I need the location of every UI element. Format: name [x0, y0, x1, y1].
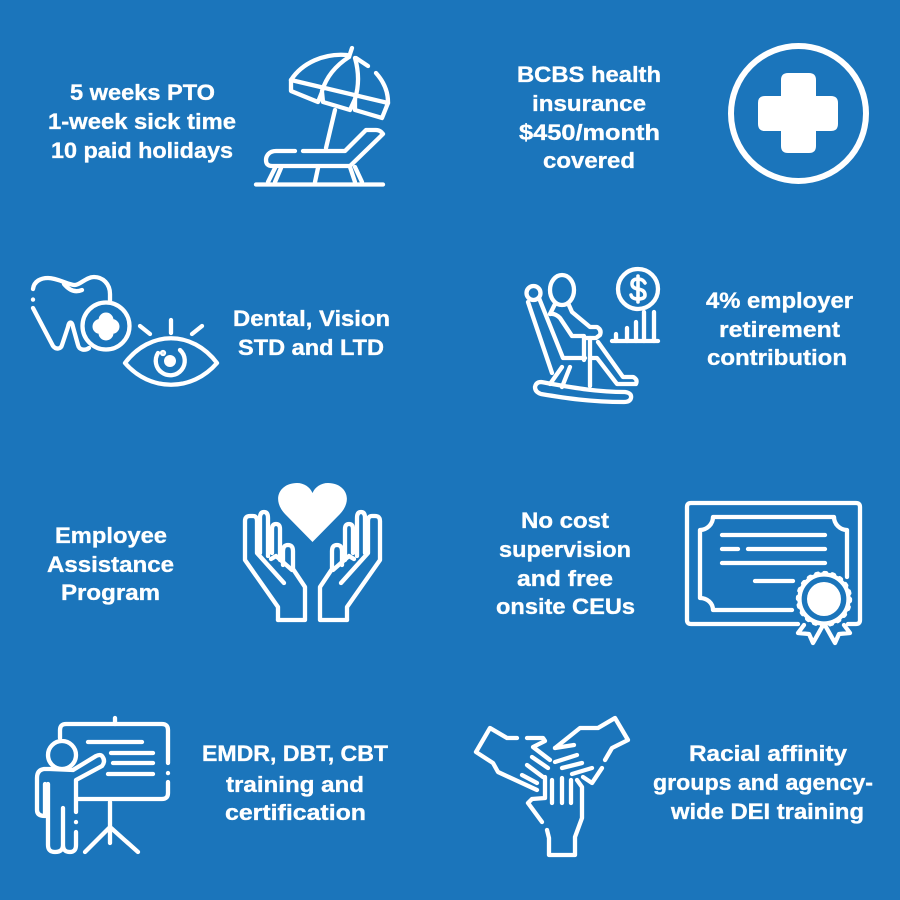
text: supervision and CEUs: onsite CEUs	[496, 594, 635, 619]
text: DEI: wide DEI training	[670, 799, 864, 824]
text: supervision and CEUs	[496, 508, 635, 619]
text: supervision and CEUs: No cost	[521, 508, 610, 533]
text: trainings: EMDR, DBT, CBT	[202, 741, 389, 766]
icon: tooth and eye	[33, 277, 217, 385]
text: dental and vision: STD and LTD	[238, 335, 384, 360]
text: DEI: Racial affinity	[689, 741, 848, 766]
text: time off: 1-week sick time	[48, 109, 236, 134]
text: time off	[48, 80, 236, 163]
text: employee assistance program: Employee	[55, 523, 167, 548]
text: supervision and CEUs: and free	[517, 566, 613, 591]
text: employee assistance program	[47, 523, 174, 605]
icon: left hand	[245, 512, 305, 620]
text: employee assistance program: Assistance	[47, 552, 174, 577]
text: dental and vision: Dental, Vision	[233, 306, 390, 331]
text: health insurance: BCBS health	[517, 62, 661, 87]
text: health insurance: covered	[543, 148, 635, 173]
text: dental and vision	[233, 306, 390, 360]
text: health insurance	[517, 62, 661, 173]
text: trainings: certification	[225, 800, 366, 825]
text: time off: 10 paid holidays	[51, 138, 233, 163]
text: trainings: training and	[226, 772, 364, 797]
icon: beach umbrella and lounger	[256, 48, 388, 184]
icon: certificate with seal	[687, 503, 860, 643]
text: trainings	[202, 741, 389, 825]
text: retirement contribution: 4% employer	[706, 288, 853, 313]
icon: three joined hands	[476, 718, 628, 855]
text: DEI	[653, 741, 873, 824]
text: employee assistance program: Program	[61, 580, 160, 605]
text: DEI: groups and agency-	[653, 770, 873, 795]
text: retirement contribution: retirement	[719, 317, 841, 342]
icon: presenter at whiteboard	[37, 718, 168, 852]
text: time off: 5 weeks PTO	[70, 80, 215, 105]
text: supervision and CEUs: supervision	[499, 537, 631, 562]
text: retirement contribution: contribution	[707, 345, 847, 370]
icon: medical cross in circle	[731, 46, 866, 181]
icon: hands holding heart	[245, 483, 380, 620]
text: retirement contribution	[706, 288, 853, 370]
text: health insurance: $450/month	[519, 120, 660, 145]
icon: right hand	[320, 512, 380, 620]
text: health insurance: insurance	[532, 91, 646, 116]
icon: retiree in rocking chair with savings	[526, 269, 658, 402]
